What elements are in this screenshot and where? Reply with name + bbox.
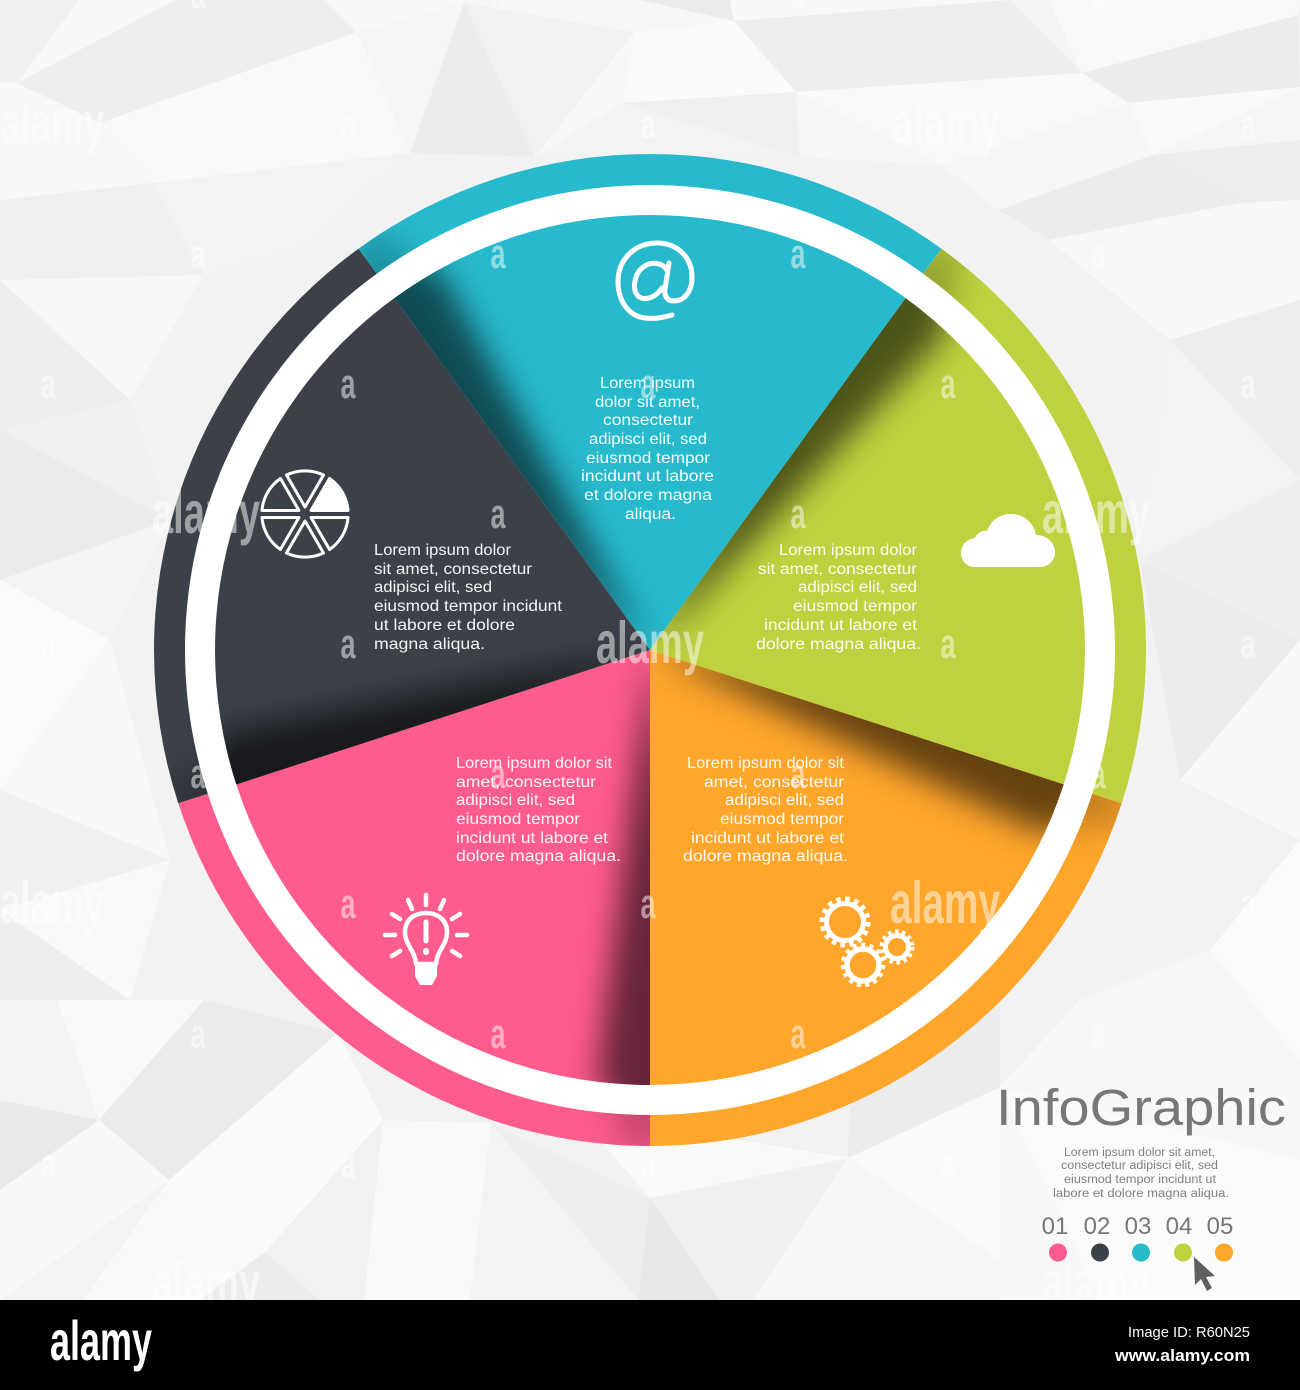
watermark: alamy background marks: alamy bbox=[1042, 1250, 1150, 1316]
text: dark wedge: adipisci elit, sed bbox=[374, 579, 492, 596]
text: teal wedge: et dolore magna bbox=[584, 487, 712, 504]
text: green wedge: adipisci elit, sed bbox=[798, 579, 917, 596]
text: teal wedge: incidunt ut labore bbox=[581, 468, 714, 485]
text: orange wedge: dolore magna aliqua. bbox=[683, 848, 848, 865]
watermark: small a marks: a bbox=[790, 750, 806, 797]
text: dark wedge: Lorem ipsum dolor bbox=[374, 542, 511, 559]
text: teal wedge: Lorem ipsum bbox=[600, 375, 695, 392]
legend numbers: 01 bbox=[1042, 1213, 1068, 1240]
text: pink wedge: dolore magna aliqua. bbox=[456, 848, 621, 865]
wedge: orange bbox=[650, 650, 1064, 1085]
watermark: small a marks: a bbox=[340, 100, 356, 147]
text: teal wedge: aliqua. bbox=[625, 506, 676, 523]
watermark: small a marks: a bbox=[940, 1140, 956, 1187]
legend text bbox=[1053, 1147, 1229, 1200]
watermark: small a marks: a bbox=[640, 360, 656, 407]
watermark: small a marks: a bbox=[40, 880, 56, 927]
icon: cursor arrow bbox=[1194, 1257, 1215, 1291]
watermark: small a marks: a bbox=[1240, 880, 1256, 927]
watermark: small a marks: a bbox=[1240, 100, 1256, 147]
text: orange wedge: adipisci elit, sed bbox=[725, 792, 844, 809]
watermark: alamy foreground marks bbox=[152, 480, 1150, 936]
text: dark wedge: magna aliqua. bbox=[374, 636, 485, 653]
watermark: small a marks: a bbox=[340, 620, 356, 667]
watermark: small a marks: a bbox=[1090, 1010, 1106, 1057]
watermark: small a marks: a bbox=[1090, 750, 1106, 797]
legend numbers: 03 bbox=[1125, 1213, 1151, 1240]
outer ring: dark arc bbox=[154, 248, 377, 804]
footer bar bbox=[0, 1300, 1300, 1390]
legend numbers: 05 bbox=[1207, 1213, 1233, 1240]
watermark: alamy background marks: alamy bbox=[0, 90, 104, 156]
watermark: small a marks: a bbox=[490, 490, 506, 537]
icon: pie chart bbox=[258, 471, 352, 557]
legend numbers: 02 bbox=[1084, 1213, 1110, 1240]
wedge: teal bbox=[340, 215, 906, 650]
text: dark wedge: sit amet, consectetur bbox=[374, 561, 532, 578]
text: orange wedge: amet, consectetur bbox=[704, 774, 844, 791]
watermark: small a marks: a bbox=[640, 880, 656, 927]
wedge: dark bbox=[215, 298, 650, 784]
icon: gears bbox=[822, 899, 912, 985]
text: pink wedge: eiusmod tempor bbox=[456, 811, 580, 828]
text: pink wedge bbox=[456, 755, 621, 865]
outer ring: teal arc bbox=[358, 154, 942, 274]
watermark: small a marks: a bbox=[340, 880, 356, 927]
watermark: alamy foreground marks: alamy bbox=[890, 870, 1000, 936]
footer image id: Image ID: R60N25 bbox=[1128, 1324, 1250, 1341]
watermark: small a marks: a bbox=[40, 360, 56, 407]
text: orange wedge: incidunt ut labore et bbox=[691, 830, 845, 847]
watermark: small a marks: a bbox=[640, 1140, 656, 1187]
legend title: InfoGraphic bbox=[996, 1079, 1286, 1136]
text: teal wedge: consectetur bbox=[603, 412, 693, 429]
watermark: small a marks: a bbox=[790, 490, 806, 537]
text: dark wedge bbox=[374, 542, 563, 653]
legend text: labore et dolore magna aliqua. bbox=[1053, 1188, 1229, 1200]
watermark: alamy foreground marks: alamy bbox=[596, 610, 704, 676]
watermark: small a marks: a bbox=[40, 1140, 56, 1187]
text: orange wedge bbox=[683, 755, 848, 865]
watermark: small a marks: a bbox=[340, 360, 356, 407]
watermark: alamy background marks: alamy bbox=[892, 90, 1000, 156]
watermark: small a marks: a bbox=[790, 1010, 806, 1057]
watermark: small a marks: a bbox=[940, 620, 956, 667]
text: green wedge: eiusmod tempor bbox=[793, 598, 917, 615]
legend numbers bbox=[1042, 1213, 1233, 1240]
watermark: small a marks: a bbox=[790, 230, 806, 277]
watermark: small a marks: a bbox=[940, 360, 956, 407]
text: pink wedge: Lorem ipsum dolor sit bbox=[456, 755, 613, 772]
watermark: small a marks: a bbox=[1240, 620, 1256, 667]
text: pink wedge: adipisci elit, sed bbox=[456, 792, 575, 809]
wedge: pink bbox=[236, 650, 650, 1085]
watermark: alamy background marks: alamy bbox=[0, 870, 104, 936]
icon: cloud bbox=[961, 514, 1055, 567]
watermark: small a marks: a bbox=[490, 1010, 506, 1057]
watermark: small a marks: a bbox=[190, 1010, 206, 1057]
outer ring: orange arc bbox=[650, 794, 1122, 1146]
watermark: alamy foreground marks: alamy bbox=[1042, 480, 1150, 546]
watermark: small a marks: a bbox=[190, 230, 206, 277]
watermark: small a marks: a bbox=[490, 230, 506, 277]
text: green wedge: incidunt ut labore et bbox=[764, 617, 918, 634]
watermark: small a marks bbox=[40, 0, 1256, 1187]
watermark: small a marks: a bbox=[1090, 230, 1106, 277]
white ring bbox=[185, 185, 1115, 1115]
text: teal wedge bbox=[581, 375, 714, 523]
icon: light bulb bbox=[385, 895, 467, 985]
legend text: Lorem ipsum dolor sit amet, bbox=[1064, 1147, 1215, 1159]
legend numbers: 04 bbox=[1166, 1213, 1192, 1240]
outer ring: green arc bbox=[923, 248, 1146, 804]
footer url: www.alamy.com bbox=[1114, 1346, 1250, 1365]
text: green wedge bbox=[756, 542, 921, 653]
watermark: alamy foreground marks: alamy bbox=[152, 480, 260, 546]
watermark: alamy background marks bbox=[0, 90, 1150, 1316]
icon: at sign bbox=[618, 243, 692, 318]
text: teal wedge: eiusmod tempor bbox=[586, 450, 710, 467]
watermark: small a marks: a bbox=[190, 750, 206, 797]
watermark: small a marks: a bbox=[340, 1140, 356, 1187]
text: dark wedge: ut labore et dolore bbox=[374, 617, 515, 634]
watermark: small a marks: a bbox=[490, 750, 506, 797]
outer ring: pink arc bbox=[178, 794, 650, 1146]
legend text: eiusmod tempor incidunt ut bbox=[1064, 1174, 1217, 1186]
watermark: small a marks: a bbox=[640, 100, 656, 147]
footer logo: alamy bbox=[50, 1309, 152, 1372]
text: dark wedge: eiusmod tempor incidunt bbox=[374, 598, 563, 615]
wedge: green bbox=[650, 298, 1085, 784]
text: green wedge: Lorem ipsum dolor bbox=[779, 542, 917, 559]
legend dots bbox=[1049, 1244, 1233, 1262]
text: green wedge: dolore magna aliqua. bbox=[756, 636, 921, 653]
text: teal wedge: dolor sit amet, bbox=[595, 394, 700, 411]
watermark: small a marks: a bbox=[1240, 360, 1256, 407]
text: green wedge: sit amet, consectetur bbox=[758, 561, 917, 578]
watermark: alamy background marks: alamy bbox=[152, 1250, 260, 1316]
watermark: small a marks: a bbox=[40, 620, 56, 667]
text: orange wedge: Lorem ipsum dolor sit bbox=[687, 755, 845, 772]
text: pink wedge: amet, consectetur bbox=[456, 774, 596, 791]
text: teal wedge: adipisci elit, sed bbox=[589, 431, 707, 448]
text: pink wedge: incidunt ut labore et bbox=[456, 830, 609, 847]
legend text: consectetur adipisci elit, sed bbox=[1061, 1160, 1218, 1172]
text: orange wedge: eiusmod tempor bbox=[720, 811, 844, 828]
